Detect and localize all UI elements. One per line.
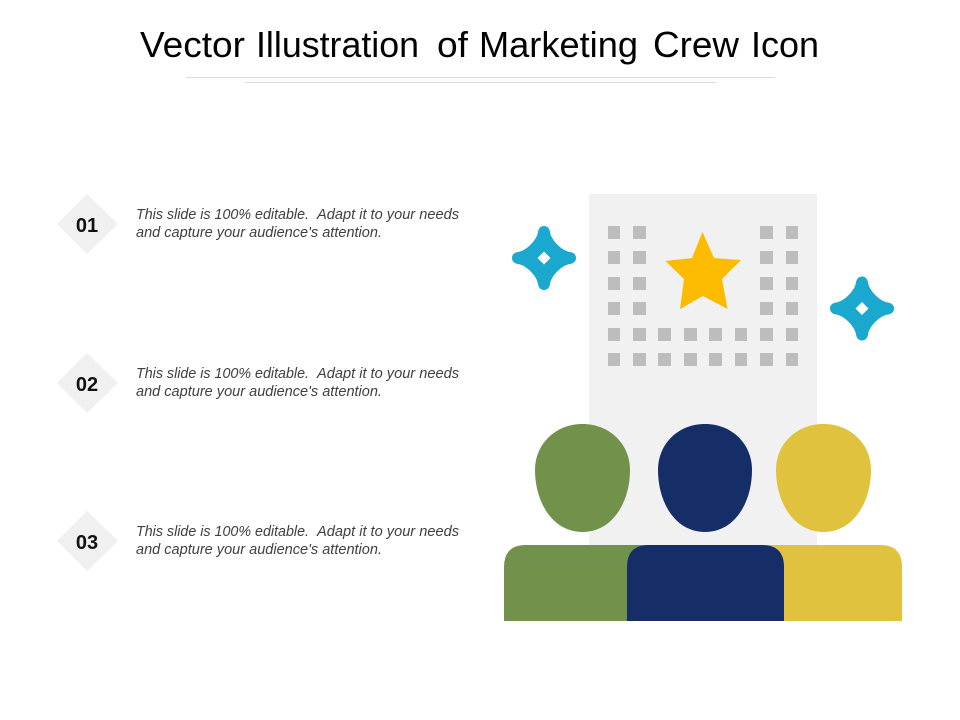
description 03: Adapt it to your needs [316, 524, 459, 540]
number badge 01 [57, 194, 118, 254]
description 03 [136, 524, 459, 558]
title: Vector [140, 24, 245, 65]
icon: right sparkle [830, 276, 894, 340]
person: green [504, 424, 660, 621]
title: Crew [653, 24, 740, 65]
person: yellow [700, 424, 902, 621]
number badge 02 [57, 353, 118, 413]
description 03: This slide is 100% editable. [136, 524, 309, 540]
description 03: and capture your audience's attention. [136, 542, 382, 558]
number badge 03: 03 [76, 532, 98, 554]
item 01 [57, 194, 459, 254]
icon: star [666, 232, 741, 309]
description 01: This slide is 100% editable. [136, 207, 309, 223]
icon: left sparkle [512, 226, 576, 290]
number badge 03 [57, 511, 118, 571]
description 02: and capture your audience's attention. [136, 384, 382, 400]
description 01: and capture your audience's attention. [136, 225, 382, 241]
description 01 [136, 207, 459, 241]
item 02 [57, 353, 459, 413]
description 02: Adapt it to your needs [316, 366, 459, 382]
number badge 02: 02 [76, 374, 98, 396]
description 02 [136, 366, 459, 400]
title [140, 24, 819, 65]
title: Icon [751, 24, 819, 65]
title: Marketing [479, 24, 638, 65]
description 01: Adapt it to your needs [316, 207, 459, 223]
building [589, 194, 817, 546]
illustration: marketing crew icon [504, 194, 902, 621]
item 03 [57, 511, 459, 571]
person: navy [627, 424, 784, 621]
title: of [437, 24, 469, 65]
number badge 01: 01 [76, 215, 98, 237]
building windows [608, 226, 798, 366]
description 02: This slide is 100% editable. [136, 366, 309, 382]
title: Illustration [256, 24, 419, 65]
